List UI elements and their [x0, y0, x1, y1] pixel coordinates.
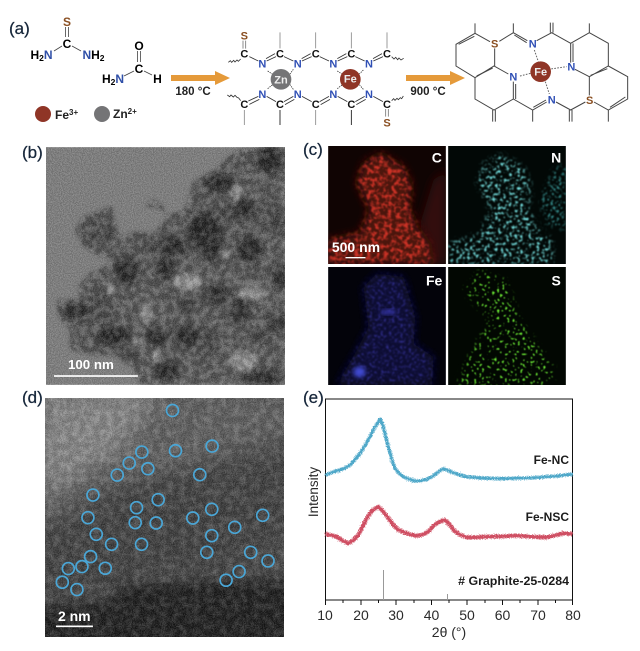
structure: Zn and Fe coordinated polymer	[227, 31, 404, 130]
structure: Zn and Fe coordinated polymer: C	[383, 99, 391, 111]
series labels	[458, 453, 569, 588]
panel: (d) HAADF-STEM micrograph with circled Fe atoms	[45, 398, 284, 637]
structure: Fe-N-S carbon: N	[548, 94, 556, 106]
molecule: formamide	[102, 39, 162, 87]
arrow: 900 °C	[406, 71, 465, 98]
plot frame and ticks	[326, 399, 572, 605]
structure: Zn and Fe coordinated polymer: C	[240, 49, 248, 61]
panel: (c) nitrogen EDS map: N	[551, 150, 561, 166]
molecule: formamide: N	[115, 72, 124, 86]
structure: Zn and Fe coordinated polymer: N	[258, 89, 266, 101]
panel: (c) sulfur EDS map	[448, 267, 566, 385]
panel label (d): (d)	[22, 388, 43, 407]
series labels: # Graphite-25-0284	[458, 574, 569, 588]
arrow: 900 °C: 900 °C	[410, 86, 446, 98]
x axis tick labels: 50	[459, 607, 475, 623]
panel: (b) TEM micrograph: 100 nm	[68, 357, 114, 372]
panel: (c) iron EDS map	[328, 267, 446, 385]
molecule: formamide: C	[135, 62, 144, 76]
x axis tick labels: 20	[353, 607, 369, 623]
structure: Zn and Fe coordinated polymer: S	[383, 118, 391, 130]
x axis tick labels: 60	[495, 607, 510, 623]
structure: Zn and Fe coordinated polymer: N	[365, 89, 373, 101]
x axis tick labels: 80	[565, 607, 581, 623]
structure: Zn and Fe coordinated polymer: S	[241, 31, 248, 43]
structure: Zn and Fe coordinated polymer: Zn	[274, 74, 288, 86]
legend: Fe3+ and Zn2+: Fe	[55, 108, 69, 122]
structure: Zn and Fe coordinated polymer: C	[276, 49, 284, 61]
structure: Zn and Fe coordinated polymer: N	[329, 58, 337, 70]
molecule: thiourea: NH	[82, 48, 100, 62]
structure: Zn and Fe coordinated polymer: N	[329, 89, 337, 101]
structure: Fe-N-S carbon: Fe	[534, 66, 547, 78]
molecule: thiourea: S	[63, 15, 71, 29]
x axis title: 2θ (°)	[432, 624, 466, 640]
molecule: thiourea: N	[44, 48, 53, 62]
structure: Fe-N-S carbon: S	[491, 38, 498, 50]
panel: (a) synthesis scheme	[9, 15, 628, 130]
x axis tick labels: 10	[317, 607, 333, 623]
molecule: formamide: H	[102, 72, 111, 86]
panel label (a): (a)	[9, 19, 30, 38]
structure: Zn and Fe coordinated polymer: C	[347, 49, 355, 61]
structure: Zn and Fe coordinated polymer: Fe	[344, 74, 357, 86]
legend: Fe3+ and Zn2+: Zn	[113, 107, 128, 121]
reference lines: graphite	[384, 570, 448, 600]
legend: Fe3+ and Zn2+	[35, 106, 137, 122]
molecule: formamide: O	[134, 39, 144, 53]
panel: (c) nitrogen EDS map	[448, 146, 566, 264]
curve: Fe-NC	[325, 419, 573, 481]
molecule: formamide: 2	[111, 77, 116, 87]
legend: Fe3+ and Zn2+: 3+	[69, 108, 78, 117]
structure: Fe-N-S carbon: S	[586, 95, 593, 107]
panel: (c) carbon EDS map: 500 nm	[332, 239, 380, 255]
molecule: thiourea: 2	[39, 53, 44, 63]
molecule: thiourea: C	[63, 37, 72, 51]
structure: Zn and Fe coordinated polymer: N	[294, 58, 302, 70]
structure: Zn and Fe coordinated polymer: C	[312, 49, 320, 61]
chart: XRD patterns	[306, 399, 581, 640]
curve: Fe-NSC	[325, 507, 573, 543]
legend: Fe3+ and Zn2+: 2+	[128, 107, 137, 116]
arrow: 180 °C: 180 °C	[175, 86, 211, 98]
panel label (c): (c)	[303, 140, 323, 159]
molecule: thiourea	[30, 15, 105, 63]
structure: Fe-N-S carbon	[456, 22, 628, 122]
structure: Zn and Fe coordinated polymer: C	[276, 99, 284, 111]
y axis title: Intensity	[306, 467, 321, 517]
arrow: 180 °C	[171, 71, 230, 98]
series labels: Fe-NC	[534, 453, 569, 467]
molecule: thiourea: H	[30, 48, 39, 62]
structure: Zn and Fe coordinated polymer: C	[240, 99, 248, 111]
structure: Fe-N-S carbon: N	[509, 72, 517, 84]
x axis tick labels: 30	[388, 607, 404, 623]
structure: Fe-N-S carbon: N	[567, 62, 575, 74]
panel label (b): (b)	[22, 143, 43, 162]
structure: Fe-N-S carbon: N	[529, 38, 537, 50]
structure: Zn and Fe coordinated polymer: N	[258, 58, 266, 70]
panel: (b) TEM micrograph	[46, 147, 285, 385]
panel: (c) iron EDS map: Fe	[426, 272, 443, 288]
structure: Zn and Fe coordinated polymer: C	[312, 99, 320, 111]
x axis tick labels	[317, 607, 581, 623]
x axis tick labels: 70	[530, 607, 546, 623]
panel: (d) HAADF-STEM micrograph with circled Fe atoms: 2 nm	[58, 608, 91, 624]
series labels: Fe-NSC	[526, 510, 569, 524]
structure: Zn and Fe coordinated polymer: C	[347, 99, 355, 111]
structure: Zn and Fe coordinated polymer: N	[365, 58, 373, 70]
structure: Zn and Fe coordinated polymer: N	[294, 89, 302, 101]
structure: Zn and Fe coordinated polymer: C	[383, 49, 391, 61]
molecule: formamide: H	[153, 72, 162, 86]
curves	[324, 416, 574, 546]
atom markers	[56, 404, 274, 596]
molecule: thiourea: 2	[100, 53, 105, 63]
panel: (c) sulfur EDS map: S	[551, 272, 561, 288]
panel label (e): (e)	[303, 388, 324, 407]
panel: (c) carbon EDS map	[328, 146, 446, 264]
x axis tick labels: 40	[424, 607, 439, 623]
panel: (c) carbon EDS map: C	[432, 150, 442, 166]
